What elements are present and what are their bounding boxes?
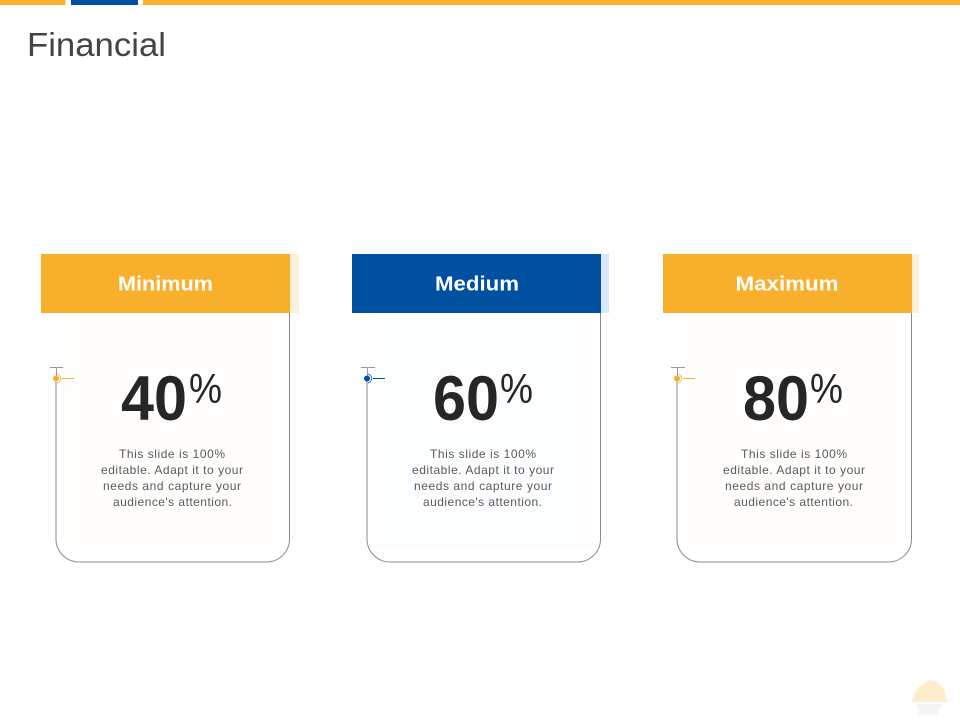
description: This slide is 100%	[430, 447, 536, 461]
description: audience's attention.	[734, 495, 853, 509]
percentage value: %	[500, 365, 533, 412]
icon: pin marker	[50, 368, 74, 383]
icon: pin marker	[671, 368, 695, 383]
top colour bar	[0, 0, 960, 5]
percentage value: %	[189, 365, 222, 412]
header band	[41, 254, 290, 313]
header accent	[601, 254, 609, 313]
heading: Minimum	[118, 274, 213, 296]
heading: Maximum	[736, 274, 838, 296]
description: This slide is 100%	[741, 447, 847, 461]
percentage value: 40	[121, 364, 187, 434]
panel: minimum	[41, 254, 299, 562]
description: editable. Adapt it to your	[101, 463, 243, 477]
heading: Medium	[435, 274, 519, 296]
percentage value: 60	[433, 364, 499, 434]
description: audience's attention.	[113, 495, 232, 509]
description: editable. Adapt it to your	[723, 463, 865, 477]
description: This slide is 100%	[119, 447, 225, 461]
percentage value: 80	[743, 364, 809, 434]
card body	[367, 313, 600, 562]
panel: medium	[352, 254, 609, 562]
header accent	[912, 254, 919, 313]
header band	[352, 254, 601, 313]
card body	[677, 313, 912, 562]
description: audience's attention.	[423, 495, 542, 509]
description: needs and capture your	[725, 479, 863, 493]
description: needs and capture your	[414, 479, 552, 493]
description: needs and capture your	[103, 479, 241, 493]
panel: maximum	[663, 254, 919, 562]
header band	[663, 254, 912, 313]
title: Financial	[27, 26, 166, 63]
card body	[56, 313, 290, 562]
description: editable. Adapt it to your	[412, 463, 554, 477]
percentage value	[121, 364, 222, 434]
icon: pin marker	[361, 368, 385, 383]
icon: hard hat and gear watermark	[912, 680, 948, 715]
header accent	[290, 254, 299, 313]
percentage value: %	[810, 365, 843, 412]
